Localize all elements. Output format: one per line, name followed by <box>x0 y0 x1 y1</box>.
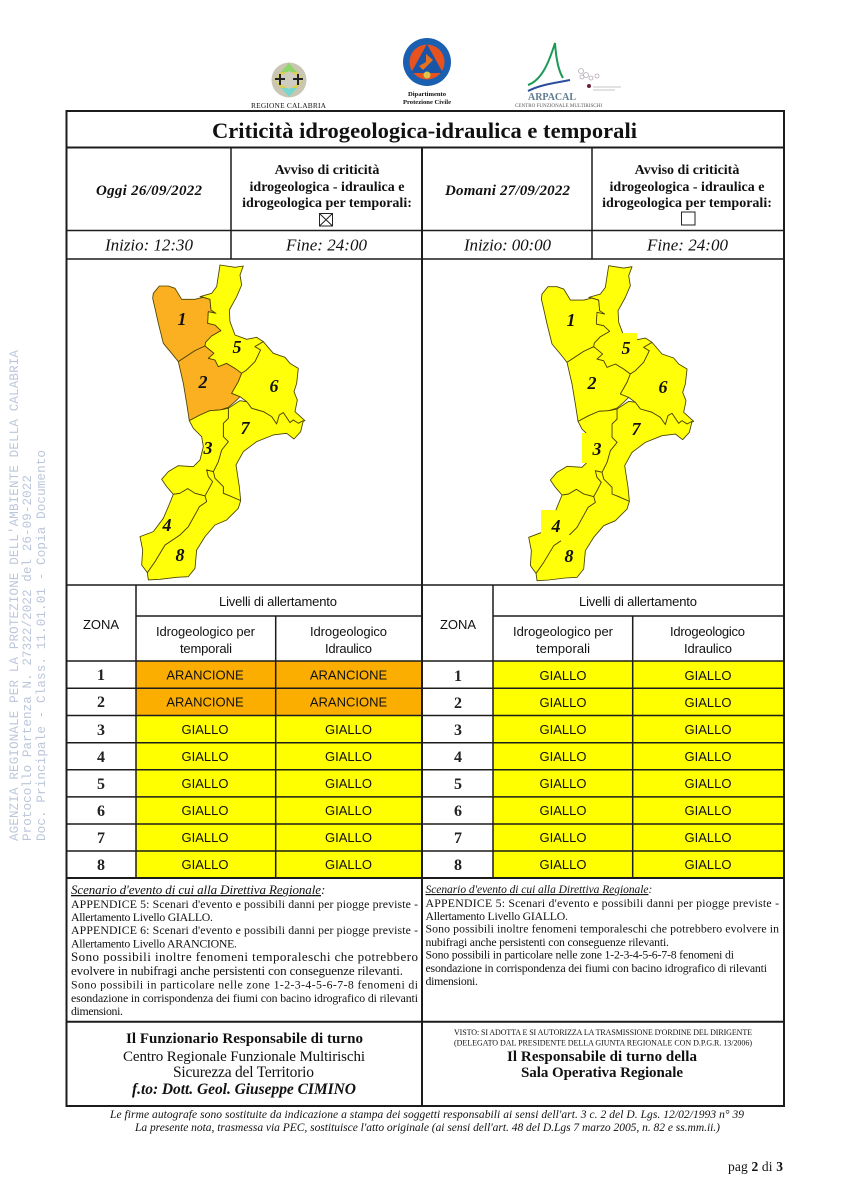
map labels: today: 7 <box>240 418 250 438</box>
watermark protocol text <box>8 350 49 841</box>
map labels: today: 8 <box>176 545 184 565</box>
table tomorrow: alert levels: 8 <box>454 857 462 874</box>
scenario text: today: APPENDICE 5: Scenari d'evento e possibili danni per piogge previste - <box>71 897 418 911</box>
table today: alert levels: temporali <box>180 641 232 656</box>
scenario text: tomorrow: esondazione in corrispondenza dei fiumi con bacino idrografico di rilevanti <box>426 961 768 975</box>
logo: Dipartimento Protezione Civile <box>403 38 451 106</box>
table today: alert levels: 7 <box>97 830 105 847</box>
map labels: tomorrow: 2 <box>586 373 596 393</box>
table tomorrow: alert levels: GIALLO <box>540 749 586 764</box>
scenario text: today: Scenario d'evento di cui alla Direttiva Regionale <box>71 882 321 897</box>
table tomorrow: alert levels: GIALLO <box>540 803 586 818</box>
table tomorrow: alert levels: GIALLO <box>685 803 731 818</box>
header: tomorrow: Inizio: 00:00 <box>463 236 552 254</box>
table tomorrow: alert levels: GIALLO <box>540 776 586 791</box>
signature: sala operativa <box>454 1028 752 1081</box>
map labels: tomorrow: 5 <box>622 338 630 358</box>
table today: alert levels: GIALLO <box>182 830 228 845</box>
header: today: Inizio: 12:30 <box>104 236 194 254</box>
watermark protocol text: Protocollo Partenza N. 27322/2022 del 26-09-2022 <box>21 475 35 841</box>
scenario text: tomorrow <box>426 884 779 988</box>
table tomorrow: alert levels: Livelli di allertamento <box>579 594 697 609</box>
map labels: today: 6 <box>270 376 278 396</box>
table today: alert levels: GIALLO <box>325 803 372 818</box>
table today: alert levels: GIALLO <box>325 830 372 845</box>
table today: alert levels <box>83 594 422 878</box>
scenario text: today: evolvere in nubifragi anche persistenti con conseguenze rilevanti. <box>71 963 403 978</box>
table tomorrow: alert levels: GIALLO <box>685 695 731 710</box>
table tomorrow: alert levels: GIALLO <box>540 668 586 683</box>
scenario text: today: APPENDICE 6: Scenari d'evento e possibili danni per piogge previste - <box>71 923 418 937</box>
signature: sala operativa: Il Responsabile di turno della <box>507 1049 698 1065</box>
logo: ARPACAL <box>515 43 621 109</box>
scenario text: tomorrow: APPENDICE 5: Scenari d'evento e possibili danni per piogge previste - <box>426 896 779 910</box>
signature: funzionario: Sicurezza del Territorio <box>173 1064 314 1081</box>
map labels: tomorrow: 3 <box>592 439 602 459</box>
header: today: Avviso di criticità <box>275 163 379 178</box>
table today: alert levels: 8 <box>97 857 105 874</box>
scenario text: today: : <box>321 882 325 897</box>
footer note: La presente nota, trasmessa via PEC, sostituisce l'atto originale (ai sensi dell'art. 48 del D.Lgs 7 marzo 2005, n. 82 e ss.mm.ii.) <box>134 1122 720 1134</box>
table tomorrow: alert levels: 3 <box>454 722 462 739</box>
watermark protocol text: Doc. Principale - Class. 11.01.01 - Copia Documento <box>35 450 49 841</box>
table tomorrow: alert levels: GIALLO <box>540 695 586 710</box>
table tomorrow: alert levels: GIALLO <box>685 749 731 764</box>
table today: alert levels: Idraulico <box>325 641 372 656</box>
signature: funzionario: f.to: Dott. Geol. Giuseppe CIMINO <box>132 1081 356 1098</box>
header: tomorrow: Fine: 24:00 <box>646 236 728 254</box>
icon: checked box <box>320 214 332 226</box>
table today: alert levels: ZONA <box>83 617 119 632</box>
map label patches: tomorrow <box>541 333 637 553</box>
table tomorrow: alert levels <box>440 594 784 878</box>
table today: alert levels: ARANCIONE <box>166 694 244 710</box>
logo: Dipartimento Protezione Civile: Dipartimento <box>408 91 447 98</box>
header: today: idrogeologica - idraulica e <box>250 180 404 195</box>
footer note <box>109 1109 744 1134</box>
table tomorrow: alert levels: temporali <box>536 641 590 656</box>
logo: ARPACAL: CENTRO FUNZIONALE MULTIRISCHI <box>515 104 602 109</box>
header: tomorrow: idrogeologica per temporali: <box>602 196 772 211</box>
table tomorrow: alert levels: 4 <box>454 749 462 766</box>
map labels: tomorrow: 1 <box>566 310 576 330</box>
logo: ARPACAL: ARPACAL <box>528 92 576 103</box>
map: today <box>140 265 305 580</box>
page number: pag 2 di 3 <box>728 1159 783 1174</box>
scenario text: today: Sono possibili inoltre fenomeni temporaleschi che potrebbero <box>71 949 418 964</box>
table today: alert levels: ARANCIONE <box>310 694 387 710</box>
table tomorrow: alert levels: Idrogeologico per <box>513 624 614 639</box>
table tomorrow: alert levels: GIALLO <box>540 830 586 845</box>
table today: alert levels: Idrogeologico <box>310 624 387 639</box>
table today: alert levels: 3 <box>97 722 105 739</box>
scenario text: today: Sono possibili in particolare nelle zone 1-2-3-4-5-6-7-8 fenomeni di <box>71 978 419 992</box>
table tomorrow: alert levels: GIALLO <box>685 830 731 845</box>
table today: alert levels: 2 <box>97 694 105 711</box>
watermark protocol text: AGENZIA REGIONALE PER LA PROTEZIONE DELL'AMBIENTE DELLA CALABRIA <box>8 350 22 841</box>
table today: alert levels: GIALLO <box>182 776 228 791</box>
signature: sala operativa: VISTO: SI ADOTTA E SI AUTORIZZA LA TRASMISSIONE D'ORDINE DEL DIRIGENTE <box>454 1028 752 1037</box>
icon: empty box <box>682 212 695 225</box>
header: today: Oggi 26/09/2022 <box>96 183 202 199</box>
header: today: idrogeologica per temporali: <box>242 196 412 211</box>
table tomorrow: alert levels: 2 <box>454 695 462 712</box>
table tomorrow: alert levels: 7 <box>454 830 462 847</box>
table tomorrow: alert levels: 5 <box>454 776 462 793</box>
logo: Dipartimento Protezione Civile: Protezione Civile <box>403 99 451 106</box>
map labels: tomorrow: 6 <box>658 377 668 397</box>
table tomorrow: alert levels: GIALLO <box>685 776 731 791</box>
map labels: today: 5 <box>232 337 242 357</box>
table today: alert levels: GIALLO <box>325 722 372 737</box>
table today: alert levels: Livelli di allertamento <box>219 594 337 609</box>
table tomorrow: alert levels: GIALLO <box>685 722 731 737</box>
scenario text: today: Allertamento Livello ARANCIONE. <box>71 936 237 950</box>
signature: sala operativa: Sala Operativa Regionale <box>521 1065 683 1081</box>
scenario text: tomorrow: dimensioni. <box>426 974 478 988</box>
scenario text: today: Allertamento Livello GIALLO. <box>71 910 213 924</box>
map labels: tomorrow: 8 <box>564 546 574 566</box>
table today: alert levels: GIALLO <box>182 722 228 737</box>
table today: alert levels: ARANCIONE <box>310 668 387 682</box>
map labels: tomorrow: 4 <box>550 516 560 536</box>
title bar <box>66 111 784 148</box>
map labels: today <box>162 309 278 565</box>
table tomorrow: alert levels: GIALLO <box>540 857 586 872</box>
table today: alert levels: 4 <box>97 749 105 766</box>
map labels: today: 4 <box>162 515 172 535</box>
scenario text: today: esondazione in corrispondenza dei fiumi con bacino idrografico di rilevanti <box>71 991 419 1005</box>
table tomorrow: alert levels: 6 <box>454 803 462 820</box>
table tomorrow: alert levels: Idraulico <box>684 641 732 656</box>
table today: alert levels: GIALLO <box>182 803 228 818</box>
map labels: today: 2 <box>198 372 208 392</box>
scenario text: tomorrow: Scenario d'evento di cui alla Direttiva Regionale <box>426 884 648 896</box>
table tomorrow: alert levels: GIALLO <box>540 722 586 737</box>
header: tomorrow: Domani 27/09/2022 <box>444 183 570 199</box>
scenario text: tomorrow: Sono possibili inoltre fenomeni temporaleschi che potrebbero evolvere in <box>426 922 779 936</box>
table today: alert levels: ARANCIONE <box>166 668 244 682</box>
scenario text: today <box>71 882 419 1018</box>
header: today <box>96 163 412 254</box>
table tomorrow: alert levels: 1 <box>454 668 462 685</box>
title bar: Criticità idrogeologica-idraulica e temporali <box>212 118 637 143</box>
table today: alert levels: 6 <box>97 803 105 820</box>
scenario text: tomorrow: : <box>648 884 652 896</box>
table today: alert levels: GIALLO <box>325 749 372 764</box>
map: tomorrow <box>529 266 694 581</box>
signature: sala operativa: (DELEGATO DAL PRESIDENTE DELLA GIUNTA REGIONALE CON D.P.G.R. 13/2006) <box>454 1038 752 1048</box>
header: today: Fine: 24:00 <box>285 236 368 254</box>
header: tomorrow: idrogeologica - idraulica e <box>610 180 764 195</box>
map labels: tomorrow <box>550 310 668 566</box>
table today: alert levels: GIALLO <box>325 857 372 872</box>
table tomorrow: alert levels: ZONA <box>440 617 476 632</box>
signature: funzionario <box>123 1031 365 1098</box>
table today: alert levels: 1 <box>97 667 105 684</box>
scenario text: tomorrow: nubifragi anche persistenti con conseguenze rilevanti. <box>426 935 669 949</box>
scenario text: today: dimensioni. <box>71 1004 123 1018</box>
map labels: today: 3 <box>202 438 212 458</box>
scenario text: tomorrow: Sono possibili in particolare nelle zone 1-2-3-4-5-6-7-8 fenomeni di <box>426 948 735 962</box>
table today: alert levels: GIALLO <box>325 776 372 791</box>
footer note: Le firme autografe sono sostituite da indicazione a stampa dei soggetti responsabili ai sensi dell'art. 3 c. 2 del D. Lgs. 12/02/1993 n° 39 <box>109 1109 744 1121</box>
table today: alert levels: 5 <box>97 776 105 793</box>
table today: alert levels: GIALLO <box>182 857 228 872</box>
table today: alert levels: GIALLO <box>182 749 228 764</box>
signature: funzionario: Centro Regionale Funzionale Multirischi <box>123 1049 365 1065</box>
table tomorrow: alert levels: GIALLO <box>685 668 731 683</box>
table tomorrow: alert levels: Idrogeologico <box>670 624 745 639</box>
scenario text: tomorrow: Allertamento Livello GIALLO. <box>426 909 568 923</box>
map labels: tomorrow: 7 <box>632 419 642 439</box>
table tomorrow: alert levels: GIALLO <box>685 857 731 872</box>
logo: Regione Calabria: REGIONE CALABRIA <box>251 101 327 110</box>
header: tomorrow <box>444 163 772 254</box>
header: tomorrow: Avviso di criticità <box>635 163 739 178</box>
signature: funzionario: Il Funzionario Responsabile di turno <box>126 1031 363 1047</box>
map labels: today: 1 <box>178 309 186 329</box>
table today: alert levels: Idrogeologico per <box>156 624 256 639</box>
logo: Regione Calabria <box>251 62 327 110</box>
